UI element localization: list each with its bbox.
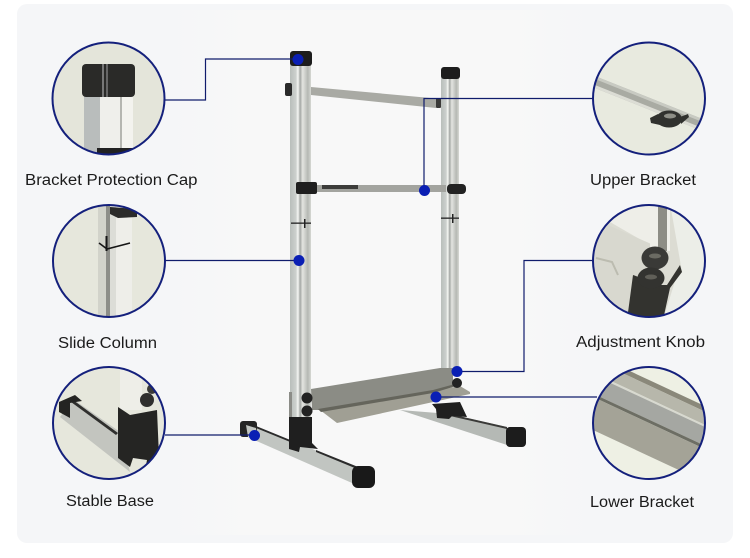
label: bracket protection cap: Bracket Protection Cap	[25, 172, 197, 189]
left knobs	[289, 392, 312, 418]
line: upper bracket	[424, 98, 594, 190]
leader lines	[165, 59, 597, 435]
detail: upper bracket	[590, 40, 710, 160]
label: slide column: Slide Column	[58, 335, 157, 352]
detail: slide column	[50, 200, 170, 320]
marker dots	[249, 54, 462, 441]
middle bracket bar	[296, 182, 466, 194]
detail: adjustment knob	[590, 200, 710, 320]
product: bracket stand	[240, 51, 526, 488]
front foot	[240, 417, 375, 488]
line: adjustment knob	[457, 260, 594, 372]
upper bracket bar	[311, 87, 441, 108]
label: adjustment knob: Adjustment Knob	[576, 334, 705, 351]
dot: protection cap	[292, 54, 304, 65]
detail: stable base	[50, 365, 170, 485]
line: protection cap	[165, 59, 298, 100]
right foot	[400, 402, 526, 447]
dot: slide column	[294, 255, 304, 266]
label: lower bracket: Lower Bracket	[590, 494, 695, 511]
detail: bracket protection cap	[50, 40, 170, 160]
left column	[285, 51, 312, 418]
label: upper bracket: Upper Bracket	[590, 172, 697, 189]
line: slide column	[165, 260, 299, 262]
line: stable base	[165, 434, 254, 436]
right column	[441, 67, 460, 376]
detail: lower bracket	[592, 366, 706, 480]
lower bracket tray	[311, 368, 470, 423]
dot: lower bracket	[430, 392, 442, 402]
dot: stable base	[249, 430, 260, 441]
dot: adjustment knob	[452, 366, 462, 377]
line: lower bracket	[436, 396, 597, 398]
dot: upper bracket	[419, 185, 430, 196]
label: stable base: Stable Base	[66, 493, 154, 510]
